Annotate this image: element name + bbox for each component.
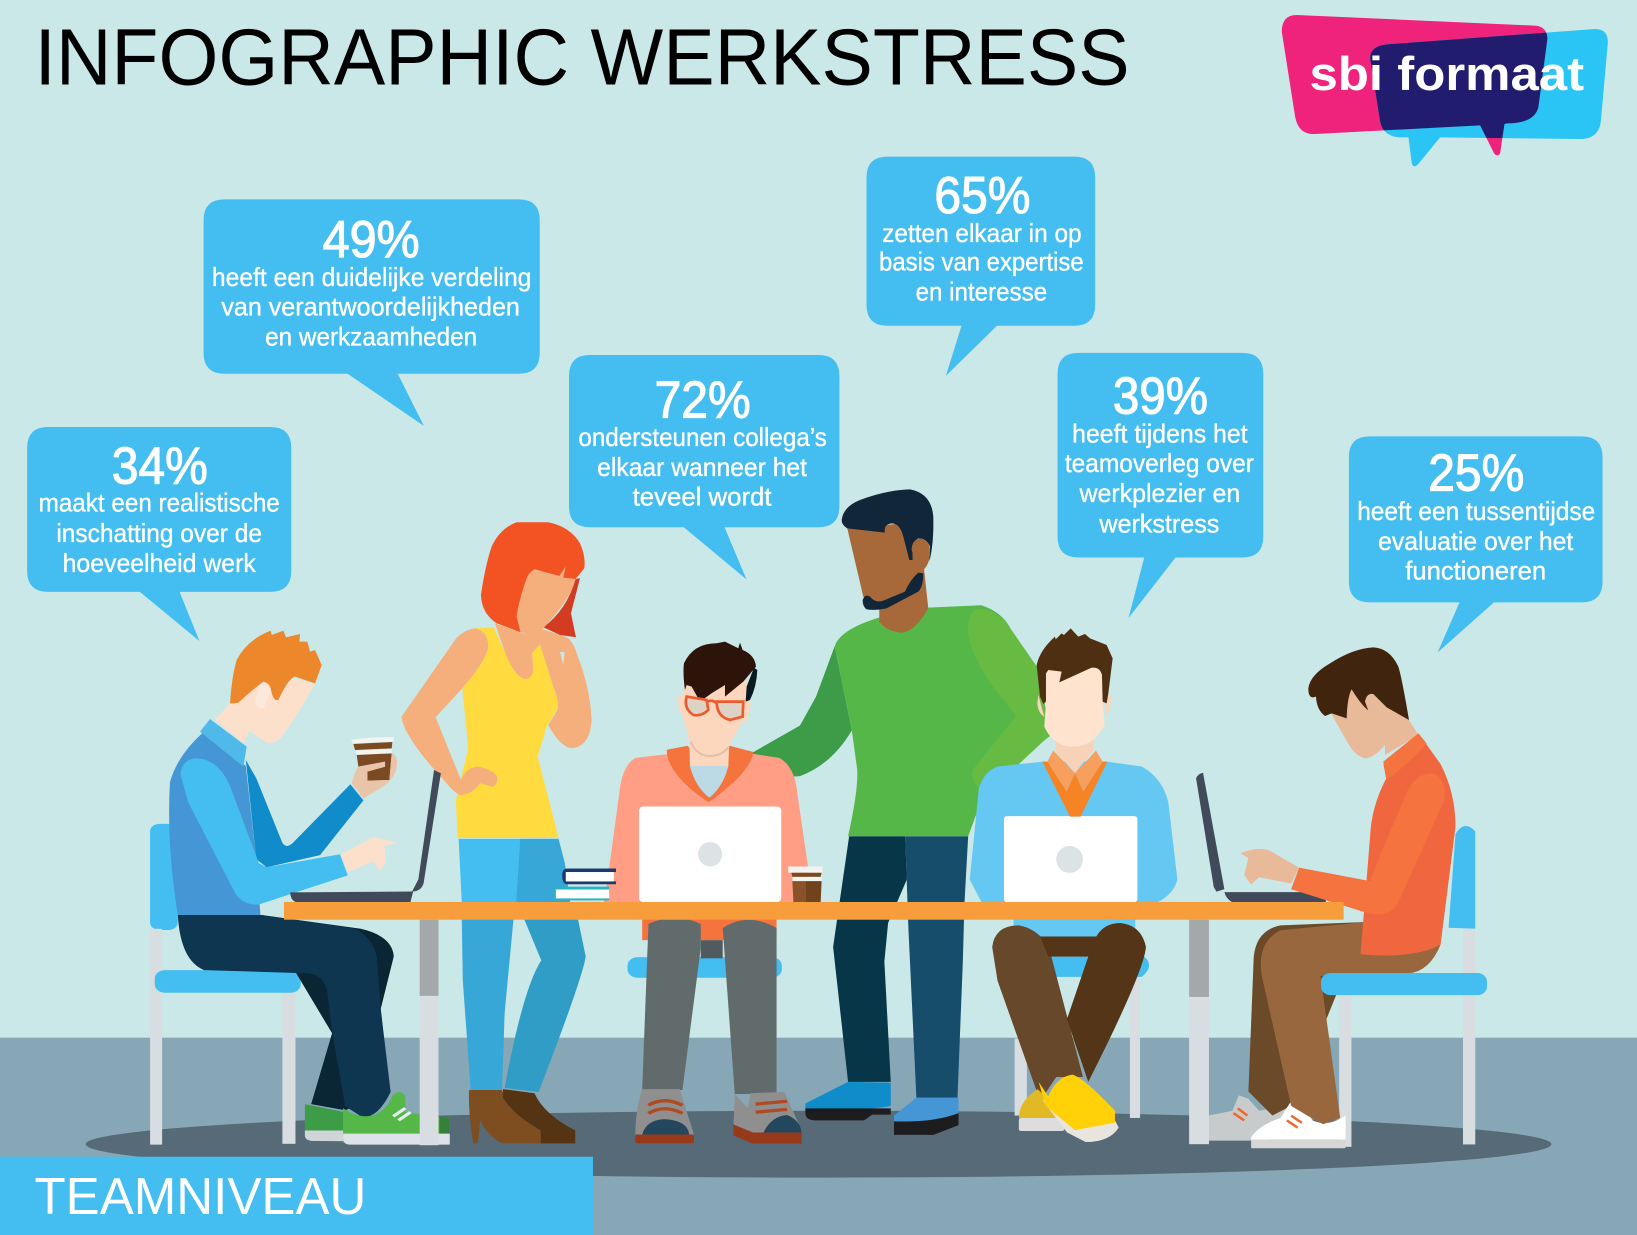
callout: 25%: evaluatie over het <box>1378 526 1574 556</box>
callout: 65%: 65% <box>934 167 1030 225</box>
icon: stacked books <box>553 868 616 900</box>
icon: glasses <box>686 697 743 720</box>
callout: 65%: en interesse <box>916 277 1047 307</box>
callout: 49%: 49% <box>323 211 420 269</box>
man in blue sweater (centre right) <box>970 628 1177 1142</box>
logo: sbi formaat: sbi formaat <box>1309 48 1584 101</box>
chair: centre <box>628 957 782 978</box>
table <box>284 902 1344 1145</box>
man in orange shirt (right) <box>1196 647 1487 1148</box>
man with glasses (centre) <box>553 642 813 1144</box>
callout: 34% <box>27 427 291 641</box>
callout: 49%: en werkzaamheden <box>265 322 477 352</box>
callout: 25%: functioneren <box>1405 555 1546 585</box>
chair: left <box>150 824 301 1145</box>
callout: 34%: maakt een realistische <box>39 488 280 518</box>
callout: 34%: hoeveelheid werk <box>63 548 257 578</box>
callout: 25%: 25% <box>1428 445 1524 503</box>
callout: 25%: heeft een tussentijdse <box>1357 496 1595 526</box>
banner: teamniveau <box>0 1157 593 1235</box>
chair: right <box>1339 826 1475 1147</box>
woman in yellow top <box>402 522 592 1143</box>
floor <box>0 1038 1637 1235</box>
callout: 25% <box>1349 436 1603 652</box>
callout: 39%: heeft tijdens het <box>1072 419 1248 449</box>
callout: 72%: 72% <box>655 372 751 430</box>
callout: 72% <box>569 355 839 579</box>
callout: 39% <box>1058 353 1263 618</box>
callout: 72%: ondersteunen collega’s <box>578 422 827 452</box>
callout: 34%: inschatting over de <box>56 518 262 548</box>
callout: 39%: teamoverleg over <box>1065 448 1254 478</box>
standing man in green sweater <box>751 489 1051 1135</box>
callout: 65% <box>867 157 1095 376</box>
callout: 39%: werkstress <box>1098 508 1219 538</box>
callout: 49%: heeft een duidelijke verdeling <box>212 262 531 292</box>
callout: 72%: teveel wordt <box>633 481 772 511</box>
banner: teamniveau: TEAMNIVEAU <box>34 1168 366 1226</box>
callout: 39%: werkplezier en <box>1079 478 1240 508</box>
callout: 65%: basis van expertise <box>879 246 1084 276</box>
floor shadow <box>86 1111 1551 1178</box>
callout: 72%: elkaar wanneer het <box>597 452 808 482</box>
callout: 49% <box>204 199 540 426</box>
title: INFOGRAPHIC WERKSTRESS <box>34 13 1130 102</box>
callout: 39%: 39% <box>1113 367 1208 425</box>
man with coffee (left) <box>169 631 450 1145</box>
icon: coffee cup in hand <box>351 737 394 781</box>
icon: coffee cup on table <box>788 866 823 903</box>
callout: 65%: zetten elkaar in op <box>882 218 1082 248</box>
callout: 49%: van verantwoordelijkheden <box>221 291 520 321</box>
callout: 34%: 34% <box>112 437 208 495</box>
chair: centre right <box>1015 957 1149 1118</box>
logo: sbi formaat <box>1282 15 1608 166</box>
